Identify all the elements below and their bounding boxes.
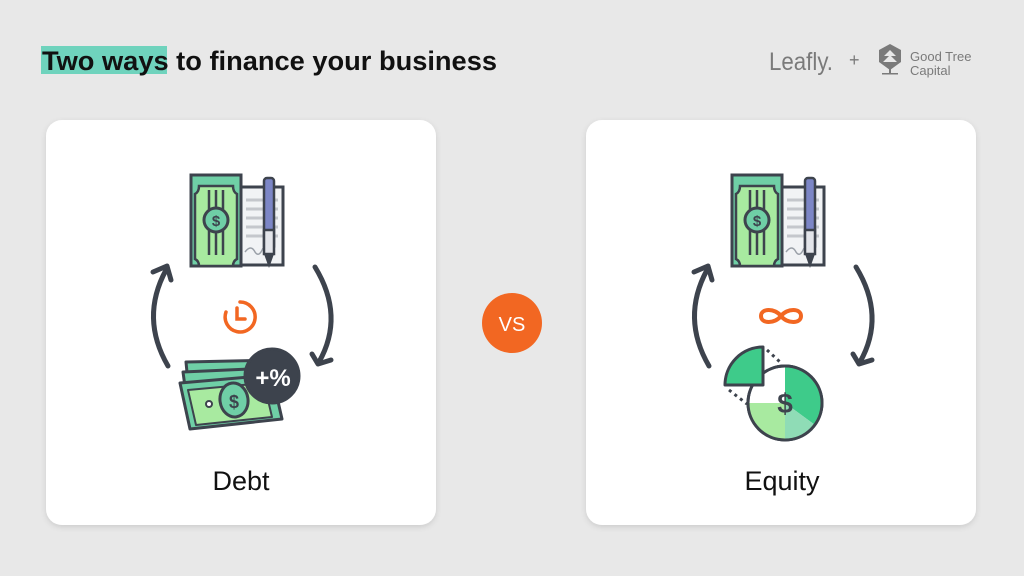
icon: pie chart bbox=[725, 347, 822, 440]
icon: bill and contract bbox=[191, 175, 283, 268]
icon: money stack with interest bbox=[180, 349, 299, 429]
icon: money stack with interest: $ bbox=[229, 392, 239, 412]
icon: clock bbox=[225, 302, 255, 332]
icon: pie chart: $ bbox=[777, 388, 793, 419]
logos: Leafly. bbox=[769, 48, 833, 76]
logos: + bbox=[849, 50, 860, 70]
arrows: cycle bbox=[694, 266, 872, 366]
panel: equity bbox=[586, 120, 976, 525]
title: Two ways to finance your business bbox=[42, 46, 497, 76]
vs badge bbox=[482, 293, 542, 353]
panel: debt bbox=[46, 120, 436, 525]
vs badge: VS bbox=[499, 314, 525, 336]
logos bbox=[769, 44, 971, 78]
icon: infinity bbox=[761, 310, 801, 322]
icon: bill and contract bbox=[732, 175, 824, 268]
label: debt: Debt bbox=[212, 466, 270, 496]
arrows: cycle bbox=[153, 266, 331, 366]
logos: Capital bbox=[910, 63, 951, 78]
label: equity: Equity bbox=[744, 466, 820, 496]
icon: money stack with interest: +% bbox=[255, 365, 291, 392]
logos: Good Tree bbox=[910, 49, 971, 64]
icon: tree logo bbox=[879, 44, 901, 74]
